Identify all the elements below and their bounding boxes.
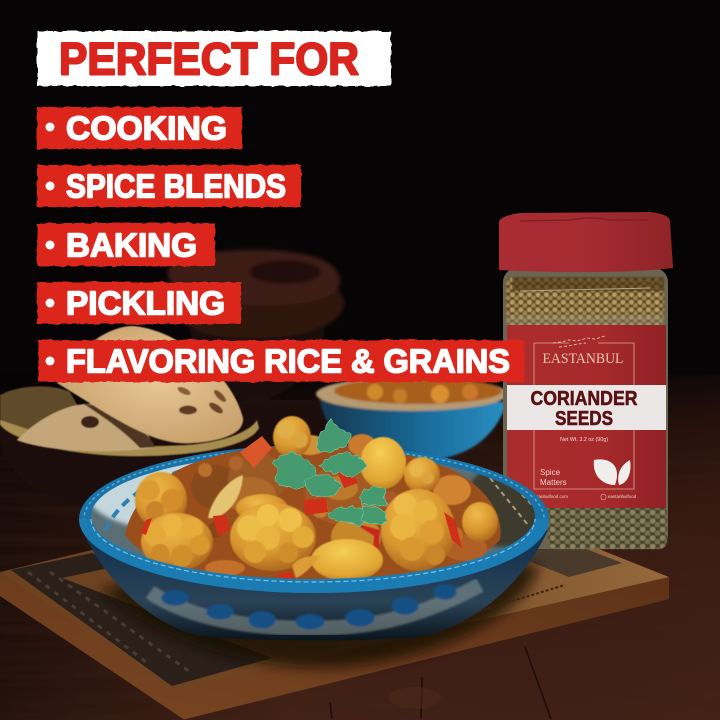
wooden table xyxy=(0,375,720,720)
curry cauliflower and potatoes xyxy=(135,416,498,581)
shadow under bowl xyxy=(100,540,540,668)
list item: cooking xyxy=(37,107,242,149)
label white band xyxy=(507,385,666,430)
icon: white leaves xyxy=(594,459,631,485)
list item: baking xyxy=(37,223,215,266)
jar label xyxy=(507,325,666,508)
seeds lower window xyxy=(548,505,667,549)
cilantro garnish lower xyxy=(328,487,388,526)
bowl painted pattern xyxy=(150,584,480,630)
board side face xyxy=(0,572,669,720)
list item: pickling: PICKLING xyxy=(66,284,225,322)
curry base xyxy=(125,445,501,582)
label net weight: Net Wt. 3.2 oz (90g) xyxy=(560,437,608,443)
board left inlay xyxy=(11,553,272,686)
list item: pickling xyxy=(37,282,241,324)
bowl inner wall xyxy=(91,453,535,579)
bowl inner wall left pale pattern xyxy=(92,462,535,549)
headline text: PERFECT FOR xyxy=(59,34,359,84)
curry red peppers xyxy=(141,436,462,581)
label footer: eastanbulfood.com xyxy=(530,494,568,499)
label product name line two: SEEDS xyxy=(555,408,613,430)
label footer: eastanbulfood xyxy=(608,494,637,499)
bowl front rim xyxy=(79,519,549,593)
board right inlay xyxy=(521,535,622,577)
curry stew chunks xyxy=(191,434,487,576)
naan plate in the background xyxy=(0,326,259,508)
list item: baking: BAKING xyxy=(66,226,197,264)
naan: upper flatbread xyxy=(57,326,243,443)
label birds xyxy=(553,336,605,347)
product jar: coriander seeds xyxy=(499,212,673,549)
serving bowl with curry xyxy=(79,416,549,640)
list item: cooking: COOKING xyxy=(66,110,227,146)
seeds upper window xyxy=(506,277,664,327)
list item: spice blends: SPICE BLENDS xyxy=(66,168,286,204)
bowl rim xyxy=(79,445,549,593)
label gold frame xyxy=(534,343,634,489)
cilantro garnish upper xyxy=(274,420,367,498)
label tagline: Spice xyxy=(540,468,561,477)
blue bowl with curry in the background xyxy=(316,377,508,460)
headline banner: PERFECT FOR xyxy=(37,31,391,86)
label footer xyxy=(530,494,637,499)
list item: flavoring rice and grains: FLAVORING RICE & GRAINS xyxy=(66,342,510,380)
label tagline xyxy=(540,468,567,487)
cutting board xyxy=(0,530,669,720)
board top face xyxy=(0,530,669,690)
bowl outer body xyxy=(82,530,548,640)
clay pot in the background xyxy=(168,250,344,470)
label brand name: EASTANBUL xyxy=(542,351,624,367)
label product name: CORIANDER xyxy=(530,388,638,410)
jar body xyxy=(503,268,668,549)
naan: lower flatbread xyxy=(17,404,153,451)
label tagline: Matters xyxy=(540,478,567,487)
jar cap xyxy=(499,212,673,272)
